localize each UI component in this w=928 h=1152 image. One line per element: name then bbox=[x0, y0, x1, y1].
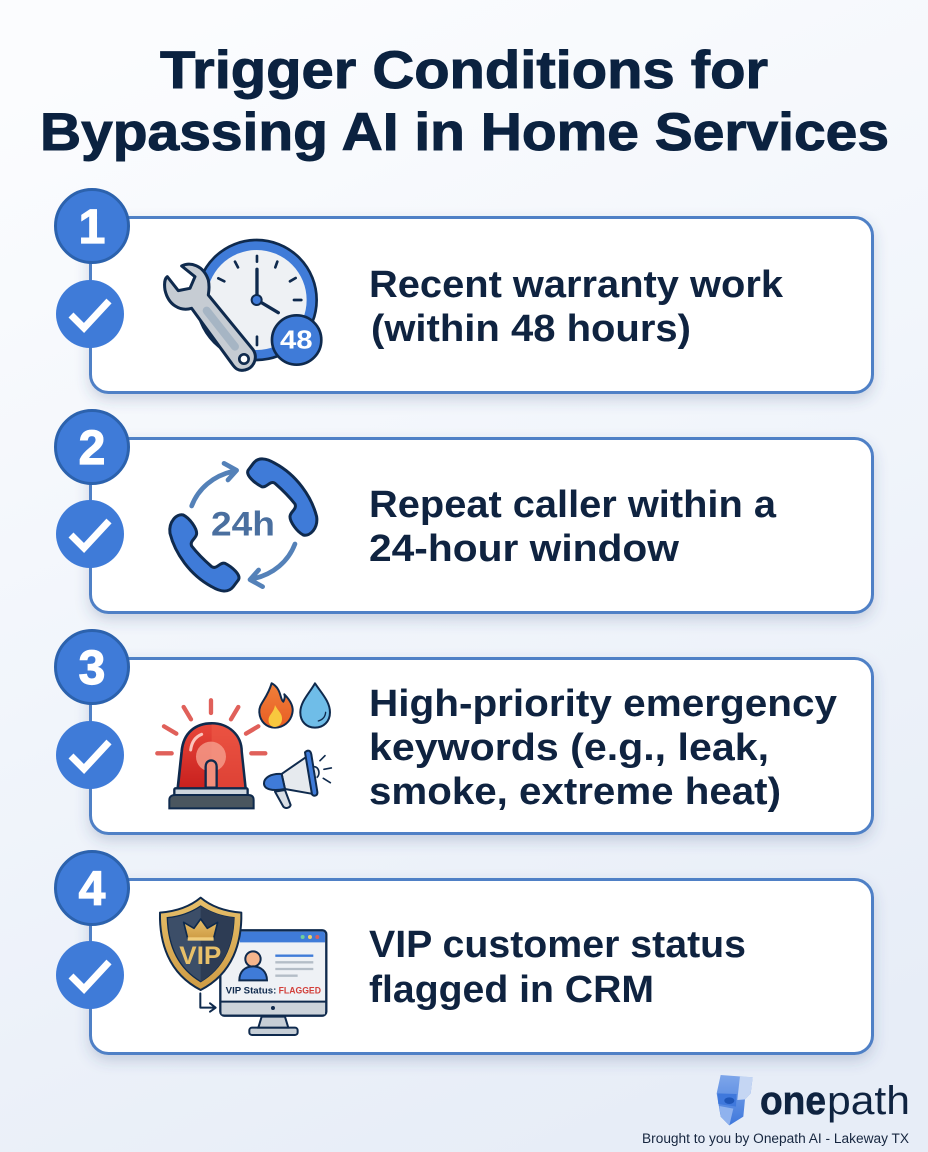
icon: clock and wrench with 48 badge: 48 bbox=[280, 324, 313, 354]
step 3 text: High-priority emergency bbox=[369, 683, 837, 725]
tagline: Brought to you by Onepath AI - Lakeway TX bbox=[642, 1131, 909, 1146]
wordmark: path bbox=[827, 1079, 910, 1123]
check badge 3 bbox=[56, 721, 124, 789]
step 2 text bbox=[369, 484, 777, 570]
number badge 1: 1 bbox=[79, 201, 105, 254]
check badge 2 bbox=[56, 500, 124, 568]
step 1 text: (within 48 hours) bbox=[371, 308, 691, 350]
icon: phones with 24h cycle: 24h bbox=[211, 506, 275, 544]
wordmark bbox=[760, 1079, 910, 1123]
step 1 text: Recent warranty work bbox=[369, 264, 784, 306]
step 3 text bbox=[369, 683, 837, 813]
title bbox=[40, 41, 889, 162]
number badge 2: 2 bbox=[79, 422, 105, 475]
logo: onepath bbox=[717, 1075, 910, 1125]
panel: step 2 repeat caller bbox=[56, 410, 872, 612]
number badge 3 bbox=[56, 630, 128, 704]
step 2 text: Repeat caller within a bbox=[369, 484, 777, 526]
panel: step 3 emergency keywords bbox=[56, 630, 872, 834]
panel: step 4 VIP status bbox=[56, 852, 872, 1054]
step 2 text: 24-hour window bbox=[369, 528, 679, 570]
card 3 bbox=[90, 658, 872, 834]
number badge 1 bbox=[56, 190, 128, 262]
step 4 text: VIP customer status bbox=[369, 924, 746, 966]
icon: VIP shield and CRM monitor: VIP bbox=[179, 942, 221, 970]
step 1 text bbox=[369, 264, 784, 350]
icon: onepath mask bbox=[717, 1075, 753, 1125]
number badge 4: 4 bbox=[79, 863, 106, 916]
step 4 text bbox=[369, 924, 746, 1011]
icon: VIP shield and CRM monitor bbox=[160, 898, 326, 1035]
card 4 bbox=[90, 880, 872, 1054]
icon: phones with 24h cycle bbox=[170, 459, 317, 591]
step 3 text: smoke, extreme heat) bbox=[369, 771, 781, 813]
number badge 4 bbox=[56, 852, 128, 924]
step 4 text: flagged in CRM bbox=[369, 969, 654, 1011]
icon: siren with flame, water drop and megaphone bbox=[157, 683, 331, 808]
check badge 1 bbox=[56, 280, 124, 348]
card 1 bbox=[90, 218, 872, 392]
card 2 bbox=[90, 438, 872, 612]
step 3 text: keywords (e.g., leak, bbox=[369, 727, 769, 769]
wordmark: one bbox=[760, 1079, 826, 1123]
number badge 3: 3 bbox=[79, 642, 105, 695]
number badge 2 bbox=[56, 410, 128, 484]
title: Bypassing AI in Home Services bbox=[40, 103, 889, 162]
icon: VIP shield and CRM monitor: FLAGGED bbox=[279, 986, 321, 996]
panel: step 1 recent warranty work bbox=[56, 190, 872, 392]
title: Trigger Conditions for bbox=[160, 41, 768, 100]
check badge 4 bbox=[56, 941, 124, 1009]
icon: VIP shield and CRM monitor: VIP Status: bbox=[226, 986, 276, 996]
icon: clock and wrench with 48 badge bbox=[165, 240, 321, 370]
